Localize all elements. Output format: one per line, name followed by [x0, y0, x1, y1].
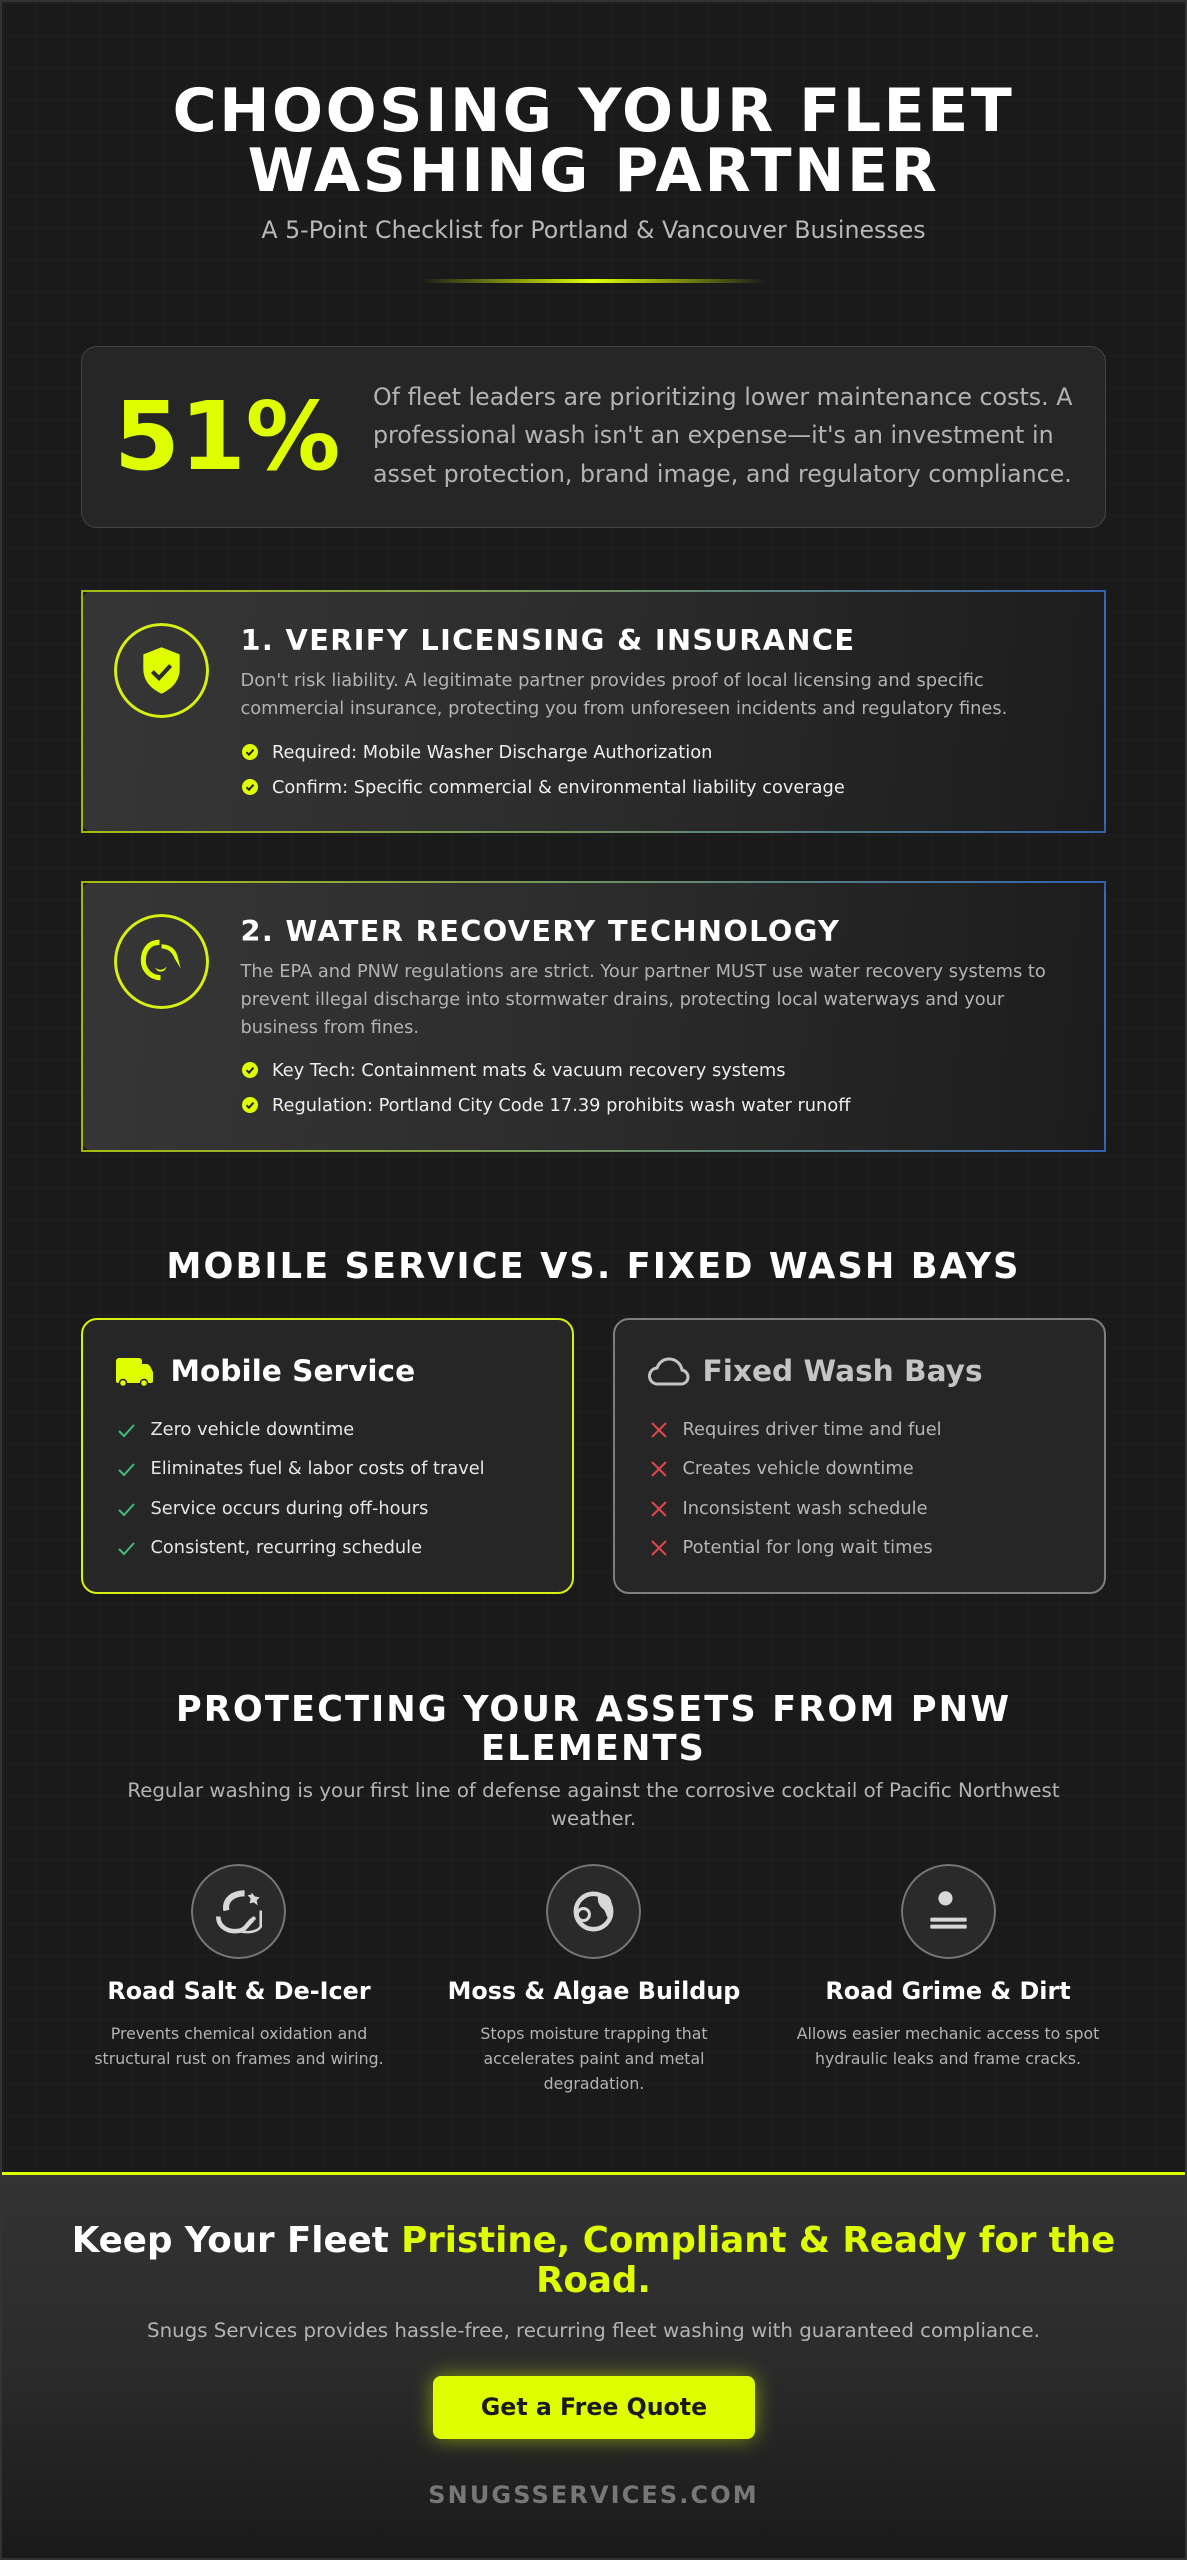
- description: [240, 670, 1007, 718]
- cta text: Snugs Services provides hassle-free, recurring fleet washing with guaranteed compliance.: [147, 2319, 1040, 2342]
- benefit 2: Eliminates fuel & labor costs of travel: [150, 1458, 485, 1479]
- description: prevent illegal discharge into stormwater drains, protecting local waterways and your: [240, 988, 1004, 1010]
- subtitle: A 5-Point Checklist for Portland & Vancouver Businesses: [261, 216, 926, 244]
- description: Don't risk liability. A legitimate partner provides proof of local licensing and specific: [240, 670, 984, 690]
- feature title: Moss & Algae Buildup: [448, 1976, 740, 2004]
- drawback 2: Creates vehicle downtime: [682, 1458, 914, 1479]
- feature description: [796, 2024, 1099, 2068]
- feature title: Road Grime & Dirt: [825, 1976, 1071, 2004]
- section intro: [127, 1779, 1060, 1830]
- statistic description: [373, 383, 1072, 488]
- icon: shield check: [114, 623, 209, 718]
- title: WASHING PARTNER: [248, 136, 939, 206]
- feature: moss and algae: [448, 1864, 740, 2092]
- panel: call to action: [2, 2172, 1185, 2558]
- panel title: Fixed Wash Bays: [702, 1354, 983, 1388]
- feature description: degradation.: [544, 2074, 644, 2092]
- description: commercial insurance, protecting you from unforeseen incidents and regulatory fines.: [240, 698, 1007, 718]
- feature: road grime: [796, 1864, 1099, 2068]
- heading: protecting your assets: ELEMENTS: [481, 1728, 706, 1769]
- panel title: Mobile Service: [170, 1354, 415, 1388]
- list: mobile benefits: [118, 1419, 485, 1558]
- checklist item: confirm: Confirm: Specific commercial & environmental liability coverage: [272, 777, 845, 798]
- cta heading: Keep Your Fleet Pristine, Compliant & Ready for the: [72, 2220, 1115, 2261]
- checklist item: required: Required: Mobile Washer Discharge Authorization: [272, 742, 712, 762]
- panel: key statistic: [81, 346, 1106, 528]
- website address: SNUGSSERVICES.COM: [428, 2480, 759, 2508]
- icon: cloud: [648, 1358, 690, 1386]
- icon: truck: [116, 1358, 153, 1386]
- statistic description: Of fleet leaders are prioritizing lower maintenance costs. A: [373, 383, 1072, 411]
- list: fixed bay drawbacks: [651, 1419, 942, 1558]
- description: The EPA and PNW regulations are strict. Your partner MUST use water recovery systems to: [240, 960, 1046, 982]
- header glow divider: [420, 279, 766, 283]
- statistic number 51%: 51%: [114, 382, 340, 492]
- feature description: Prevents chemical oxidation and: [111, 2024, 367, 2042]
- icon: moss: [546, 1864, 641, 1959]
- heading: protecting your assets: PROTECTING YOUR ASSETS FROM PNW: [176, 1689, 1011, 1730]
- feature title: Road Salt & De-Icer: [107, 1976, 371, 2004]
- panel: mobile service: [81, 1318, 574, 1594]
- feature description: [94, 2024, 384, 2068]
- statistic description: professional wash isn't an expense—it's an investment in: [373, 421, 1054, 449]
- drawback 1: Requires driver time and fuel: [682, 1419, 942, 1440]
- heading: mobile vs fixed: MOBILE SERVICE VS. FIXED WASH BAYS: [166, 1246, 1021, 1287]
- icon: road salt: [191, 1864, 286, 1959]
- title: CHOOSING YOUR FLEET: [173, 76, 1014, 146]
- section intro: Regular washing is your first line of defense against the corrosive cocktail of Pacific Northwest: [127, 1779, 1060, 1802]
- cta heading: [72, 2220, 1115, 2301]
- heading: 2. WATER RECOVERY TECHNOLOGY: [240, 914, 840, 948]
- benefit 1: Zero vehicle downtime: [150, 1419, 354, 1440]
- checklist item: key tech: Key Tech: Containment mats & vacuum recovery systems: [272, 1060, 786, 1080]
- feature description: [480, 2024, 708, 2092]
- drawback 4: Potential for long wait times: [682, 1537, 933, 1558]
- feature: road salt: [94, 1864, 384, 2068]
- description: [240, 960, 1046, 1038]
- panel: checklist 1 licensing and insurance: [81, 590, 1106, 833]
- feature description: accelerates paint and metal: [484, 2048, 704, 2068]
- feature description: Allows easier mechanic access to spot: [797, 2024, 1099, 2042]
- panel: fixed wash bays: [613, 1318, 1106, 1594]
- heading: protecting your assets: [176, 1689, 1011, 1769]
- panel: checklist 2 water recovery: [81, 881, 1106, 1152]
- icon: road grime: [901, 1864, 996, 1959]
- feature description: Stops moisture trapping that: [480, 2024, 708, 2042]
- icon: water recovery cycle: [114, 914, 209, 1009]
- description: business from fines.: [240, 1016, 419, 1038]
- benefit 4: Consistent, recurring schedule: [150, 1537, 422, 1558]
- checklist item: regulation: Regulation: Portland City Code 17.39 prohibits wash water runoff: [272, 1095, 850, 1116]
- button: get a free quote: [433, 2376, 755, 2439]
- feature description: hydraulic leaks and frame cracks.: [815, 2048, 1081, 2068]
- section intro: weather.: [551, 1807, 636, 1830]
- button: get a free quote: Get a Free Quote: [481, 2393, 707, 2421]
- statistic description: asset protection, brand image, and regulatory compliance.: [373, 460, 1072, 488]
- drawback 3: Inconsistent wash schedule: [682, 1498, 928, 1518]
- cta heading: Road.: [536, 2260, 651, 2301]
- title: [173, 76, 1014, 206]
- heading: 1. VERIFY LICENSING & INSURANCE: [240, 622, 855, 656]
- benefit 3: Service occurs during off-hours: [150, 1498, 428, 1518]
- feature description: structural rust on frames and wiring.: [94, 2048, 384, 2068]
